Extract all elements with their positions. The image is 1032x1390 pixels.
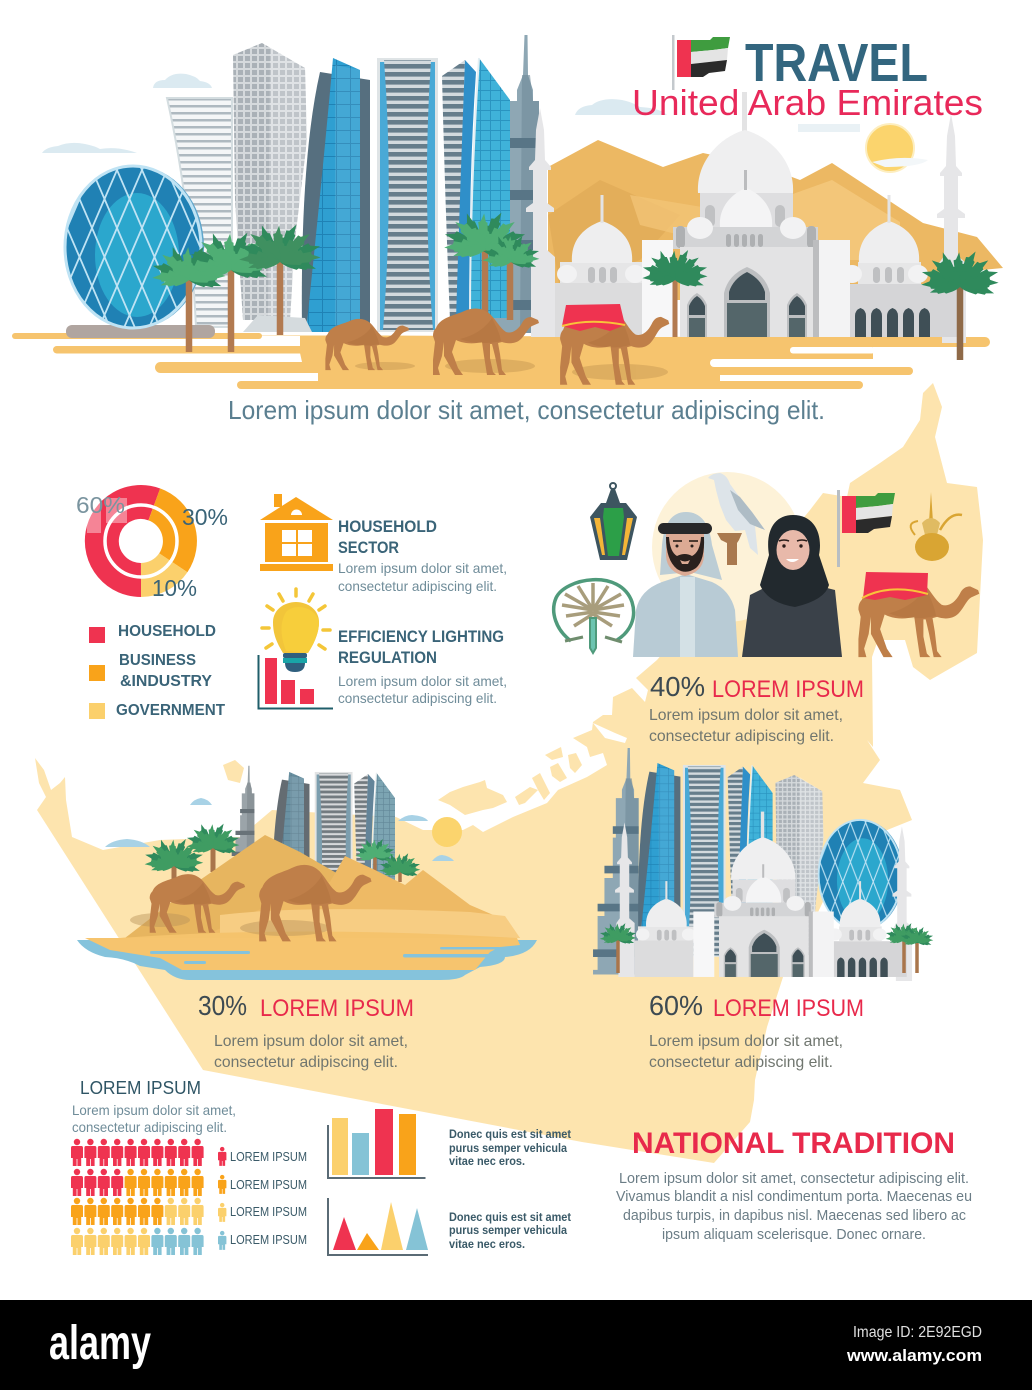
household sector text: consectetur adipiscing elit.: [338, 578, 497, 594]
bar chart: [328, 1109, 426, 1178]
national tradition paragraph: [616, 1171, 972, 1243]
30% block: consectetur adipiscing elit.: [214, 1054, 398, 1071]
pictogram legend: LOREM IPSUM: [230, 1205, 307, 1219]
60% block: consectetur adipiscing elit.: [649, 1054, 833, 1071]
map of the UAE: [35, 383, 983, 1163]
dunes: [120, 835, 520, 938]
triangle chart text: vitae nec eros.: [449, 1239, 525, 1251]
40% block: consectetur adipiscing elit.: [649, 728, 834, 745]
footer bar: Image ID: 2E92EGD: [853, 1324, 982, 1341]
efficiency text: Lorem ipsum dolor sit amet,: [338, 673, 507, 689]
icon: house: [260, 494, 333, 571]
grand mosque: [526, 92, 966, 343]
bar chart text: Donec quis est sit amet: [449, 1129, 571, 1141]
donut legend: GOVERNMENT: [116, 702, 225, 719]
bar chart text: purus semper vehicula: [449, 1143, 568, 1155]
efficiency text: consectetur adipiscing elit.: [338, 690, 497, 706]
palm trees: [151, 209, 1000, 360]
pictogram legend: LOREM IPSUM: [230, 1150, 307, 1164]
desert scene: [77, 766, 537, 980]
city and mosque scene: [593, 748, 934, 981]
icon: UAE flag: [837, 490, 895, 567]
camel right: [259, 865, 372, 941]
footer bar: alamy: [49, 1317, 151, 1370]
30% block: LOREM IPSUM: [260, 995, 414, 1022]
palms on desert island: [144, 821, 421, 882]
footer bar: [0, 1300, 1032, 1390]
people statistics heading: consectetur adipiscing elit.: [72, 1119, 227, 1135]
triangle chart text: Donec quis est sit amet: [449, 1212, 571, 1224]
efficiency text: EFFICIENCY LIGHTING: [338, 627, 504, 646]
clouds top: [42, 74, 860, 153]
60% block: LOREM IPSUM: [713, 995, 864, 1022]
pictogram legend: LOREM IPSUM: [230, 1178, 307, 1192]
30% block: [198, 990, 414, 1071]
Aldar round building: [63, 166, 215, 338]
circle backdrop: [652, 472, 802, 622]
people panel: [554, 472, 979, 657]
60% block: [649, 990, 864, 1071]
camel shadows desert: [130, 913, 330, 936]
pictogram legend: [218, 1147, 307, 1250]
icon: falcon on perch: [708, 473, 765, 565]
household sector text: Lorem ipsum dolor sit amet,: [338, 560, 507, 576]
tower: grey twisted: [233, 43, 307, 320]
household sector text: HOUSEHOLD: [338, 517, 437, 536]
icon: light bulb with chart: [258, 589, 333, 708]
40% block: [649, 671, 864, 745]
desert mountains: [548, 140, 1003, 300]
40% block: LOREM IPSUM: [712, 676, 864, 703]
national tradition heading: NATIONAL TRADITION: [632, 1127, 955, 1160]
donut legend: HOUSEHOLD: [118, 623, 216, 640]
camel shadows: [355, 359, 668, 380]
camel left: [150, 874, 245, 933]
donut legend: [89, 623, 225, 719]
camel medium: [433, 308, 539, 375]
household sector text: [338, 517, 507, 594]
donut chart: [76, 492, 228, 601]
sand ground: [12, 333, 990, 389]
top skyline scene: [12, 35, 1003, 389]
people statistics heading: Lorem ipsum dolor sit amet,: [72, 1102, 236, 1118]
60% block: 60%: [649, 990, 703, 1021]
camel small: [325, 319, 409, 370]
bar chart text: vitae nec eros.: [449, 1156, 525, 1168]
efficiency text: REGULATION: [338, 648, 437, 667]
triangle chart text: purus semper vehicula: [449, 1225, 568, 1237]
bar chart text: [449, 1129, 571, 1168]
title: TRAVEL: [745, 33, 928, 93]
small clouds and sun: [105, 798, 462, 861]
man: [633, 512, 738, 657]
woman: [742, 515, 842, 657]
tower: white striped: [167, 98, 232, 327]
national tradition paragraph: Lorem ipsum dolor sit amet, consectetur adipiscing elit.: [619, 1171, 969, 1187]
30% block: Lorem ipsum dolor sit amet,: [214, 1033, 408, 1050]
40% block: Lorem ipsum dolor sit amet,: [649, 707, 843, 724]
efficiency text: [338, 627, 507, 706]
donut chart: 10%: [152, 575, 197, 601]
60% block: Lorem ipsum dolor sit amet,: [649, 1033, 843, 1050]
people statistics heading: LOREM IPSUM: [80, 1078, 201, 1098]
icon: lantern: [590, 483, 637, 560]
triangle chart: [328, 1198, 428, 1255]
triangle chart text: [449, 1212, 571, 1251]
donut chart: 30%: [182, 504, 228, 530]
40% block: 40%: [650, 671, 705, 702]
plaza steps: [243, 315, 312, 332]
30% block: 30%: [198, 990, 247, 1021]
tower: blue: [302, 58, 370, 332]
donut legend: BUSINESS: [119, 652, 196, 669]
intro line: Lorem ipsum dolor sit amet, consectetur adipiscing elit.: [228, 395, 825, 425]
subtitle: United Arab Emirates: [632, 82, 983, 123]
pictogram grid of people: [71, 1139, 204, 1255]
national tradition paragraph: dapibus turpis, in dapibus nisl. Maecenas sed libero ac: [623, 1208, 966, 1224]
water and sand base: [77, 938, 537, 980]
icon: coffee pot: [911, 492, 962, 561]
people statistics heading: [72, 1078, 236, 1135]
tower: blue twin: [442, 58, 510, 320]
donut legend: &INDUSTRY: [120, 673, 212, 690]
tower: Burj: [479, 35, 539, 333]
icon: palm island: [554, 580, 634, 653]
tower: striped: [377, 58, 438, 332]
camel with red saddle: [560, 304, 669, 385]
small towers: [229, 766, 395, 942]
national tradition paragraph: ipsum aliquam scelerisque. Donec ornare.: [662, 1227, 926, 1243]
sun and plane: [866, 124, 928, 172]
header flag: [672, 35, 730, 90]
camel with saddle: [858, 572, 979, 657]
national tradition paragraph: Vivamus blandit a nisl condimentum porta. Maecenas eu: [616, 1189, 972, 1205]
pictogram legend: LOREM IPSUM: [230, 1233, 307, 1247]
donut chart: 60%: [76, 492, 125, 518]
household sector text: SECTOR: [338, 538, 399, 557]
footer bar: www.alamy.com: [846, 1346, 982, 1365]
